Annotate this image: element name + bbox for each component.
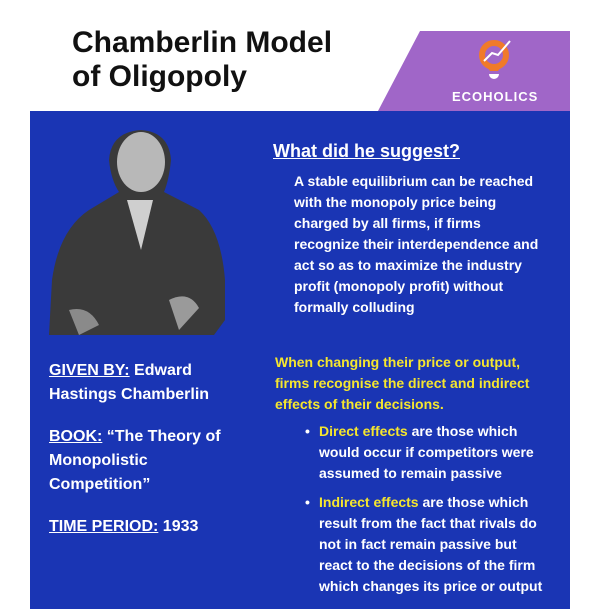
- heading: what did he suggest: What did he suggest?: [273, 141, 460, 161]
- icon: lightbulb: [479, 40, 511, 79]
- bullet: indirect: which changes its price or output: [319, 578, 542, 594]
- bullet: direct: Direct effects are those which: [319, 423, 517, 439]
- yellow statement: firms recognise the direct and indirect: [275, 375, 529, 391]
- yellow statement: effects of their decisions.: [275, 396, 444, 412]
- given by: Hastings Chamberlin: [49, 386, 209, 403]
- suggestion text: recognize their interdependence and: [294, 236, 538, 252]
- bullet: direct: [305, 423, 534, 481]
- bullet: direct: would occur if competitors were: [319, 444, 534, 460]
- bullet: indirect: result from the fact that rivals do: [319, 515, 537, 531]
- main panel: •: [305, 494, 310, 510]
- bullet: indirect: react to the decisions of the firm: [319, 557, 535, 573]
- yellow statement: When changing their price or output,: [275, 354, 520, 370]
- bullet: indirect: [305, 494, 542, 594]
- suggestion text: act so as to maximize the industry: [294, 257, 522, 273]
- given by: GIVEN BY: Edward: [49, 362, 192, 379]
- suggestion text: with the monopoly price being: [294, 194, 496, 210]
- main panel: [30, 111, 570, 609]
- main panel: •: [305, 423, 310, 439]
- book: BOOK: “The Theory of: [49, 428, 221, 445]
- title: of Oligopoly: [72, 60, 247, 93]
- logo band: [378, 31, 570, 111]
- yellow statement: [275, 354, 530, 412]
- title: Chamberlin Model: [72, 26, 332, 59]
- suggestion text: A stable equilibrium can be reached: [294, 173, 533, 189]
- suggestion text: formally colluding: [294, 299, 415, 315]
- given by: [49, 362, 209, 403]
- suggestion text: [294, 173, 538, 315]
- suggestion text: profit (monopoly profit) without: [294, 278, 503, 294]
- suggestion text: charged by all firms, if firms: [294, 215, 481, 231]
- book: Competition”: [49, 476, 150, 493]
- time period: TIME PERIOD: 1933: [49, 518, 198, 535]
- book: Monopolistic: [49, 452, 148, 469]
- bullet: direct: assumed to remain passive: [319, 465, 502, 481]
- bullet: indirect: not in fact remain passive but: [319, 536, 517, 552]
- book: [49, 428, 221, 493]
- bullet: indirect: Indirect effects are those which: [319, 494, 528, 510]
- portrait: [49, 130, 225, 335]
- logo text: ECOHOLICS: [452, 89, 538, 104]
- title: [72, 26, 332, 93]
